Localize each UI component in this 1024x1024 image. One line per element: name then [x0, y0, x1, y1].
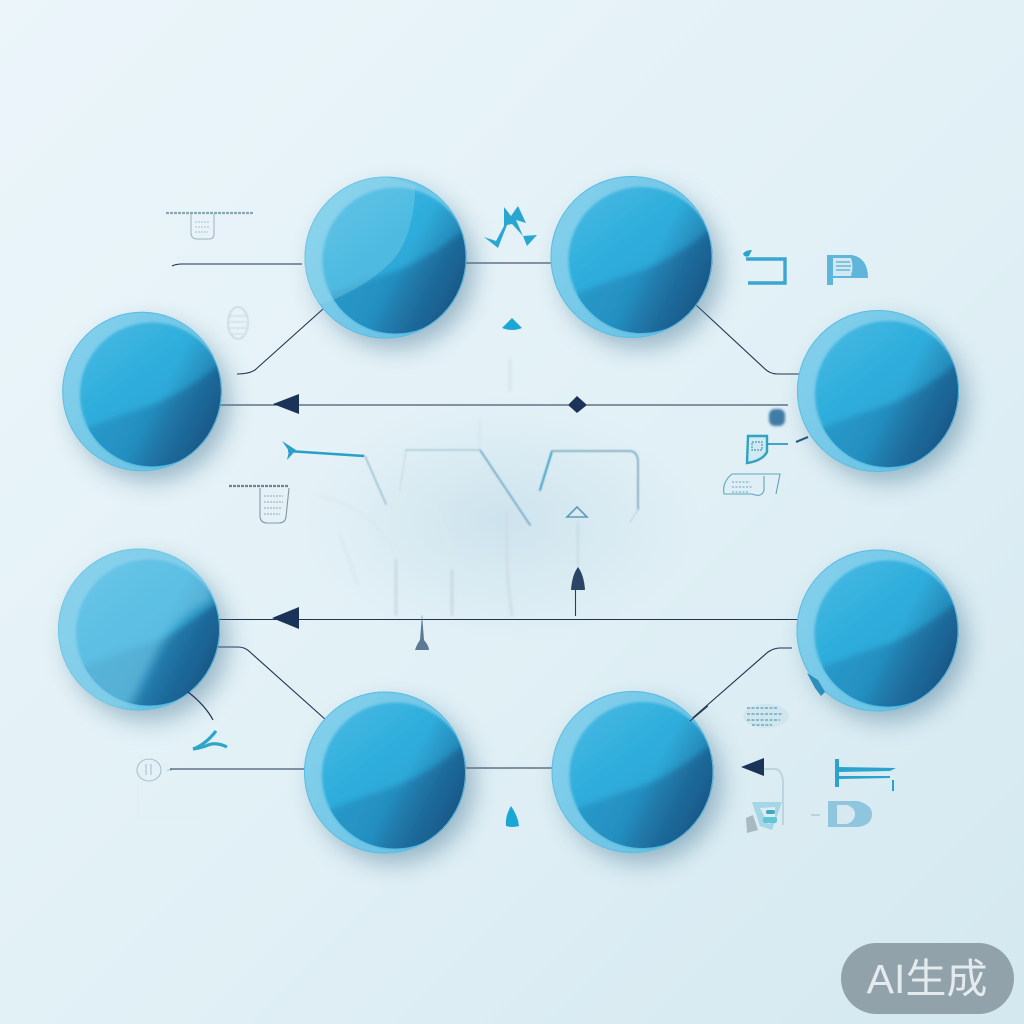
- central faded haze: [300, 395, 700, 645]
- icon: top right label block: [827, 255, 868, 285]
- node: bottom right: [552, 691, 722, 863]
- icon: small pointer lower: [415, 614, 429, 650]
- node: middle right lower: [796, 550, 968, 722]
- node: bottom left: [304, 692, 475, 864]
- connector lines: [170, 263, 800, 769]
- icon: left mid teal arrow: [282, 441, 364, 460]
- icon: right small document: [747, 436, 808, 463]
- centre stem: [574, 590, 576, 616]
- faded central diagram strokes: [365, 450, 638, 525]
- node: middle left upper: [62, 312, 231, 481]
- icon: bottom left faint badge: [137, 759, 205, 818]
- arrowhead: lower line left: [272, 607, 299, 629]
- line: bottom right tail into node: [690, 706, 708, 721]
- icon: bottom teal triangle: [506, 806, 519, 827]
- node: middle right upper: [797, 310, 968, 482]
- badge: AI generated: AI生成: [867, 956, 987, 1002]
- line: lower left tail over node: [188, 692, 213, 720]
- badge: AI generated: [841, 943, 1014, 1014]
- node: middle left lower: [49, 540, 229, 720]
- icon: top right hook: [743, 250, 785, 283]
- icon: right sketch note: [724, 474, 780, 495]
- node: top right: [550, 176, 722, 348]
- icon: bottom right bracket: [835, 759, 896, 791]
- icon: bottom right label block: [811, 801, 872, 827]
- faded central verticals: [320, 360, 578, 615]
- diamond: upper line: [568, 396, 587, 413]
- node: top left: [296, 168, 476, 348]
- icon: teal pointer on right lower node: [807, 673, 825, 696]
- arrowhead: bottom right: [741, 758, 764, 776]
- arrow stem: bottom right: [764, 769, 783, 825]
- arrowhead: upper line left: [273, 394, 299, 414]
- icon: small teal triangle: [502, 318, 522, 330]
- icon: bottom right oval note: [743, 704, 789, 728]
- icon: bottom left teal check: [193, 731, 227, 749]
- icon: dark pointer centre: [571, 567, 585, 590]
- icon: left mid sketch note: [229, 486, 289, 523]
- icon: right dark smudge: [769, 409, 785, 426]
- icon: left faint fingerprint: [228, 307, 248, 339]
- icon: top left sketch note: [166, 213, 254, 239]
- icon: small outline triangle: [567, 507, 587, 517]
- icon: bottom right shield: [746, 802, 782, 833]
- icon: top centre star mark: [484, 206, 537, 248]
